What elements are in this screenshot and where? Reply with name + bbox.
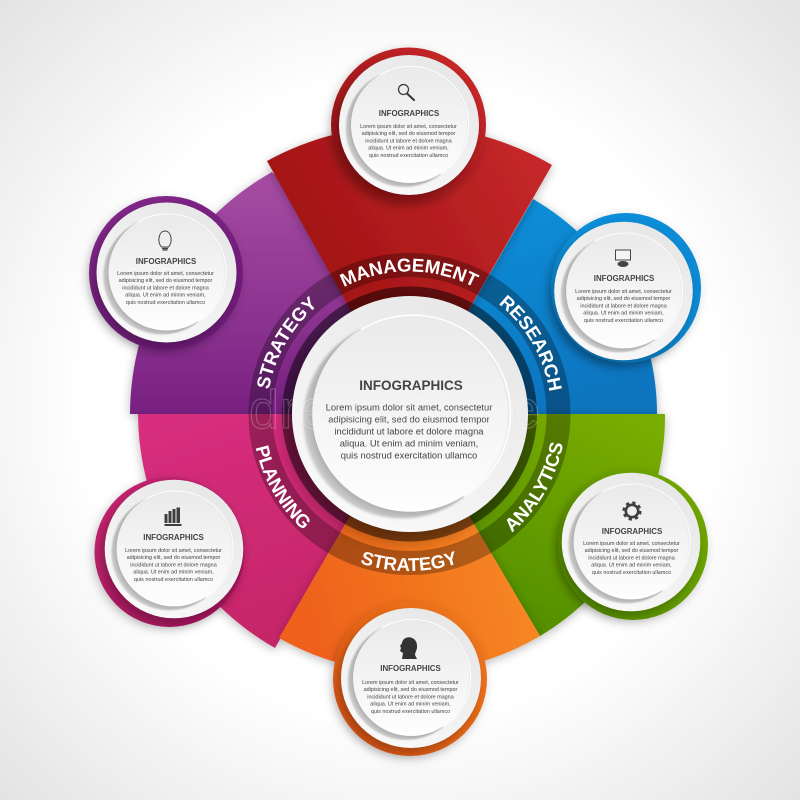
- text block: adipisicing elit, sed do eiusmod tempor: [585, 548, 679, 554]
- pink ring: [94, 477, 244, 627]
- text block: quis nostrud exercitation ullamco: [371, 709, 450, 715]
- white disc: [337, 608, 481, 754]
- label: planning: PLANNING: [256, 445, 310, 528]
- watermark: dreamstime: [249, 380, 541, 440]
- label: research: RESEARCH: [499, 294, 562, 391]
- centre text block: quis nostrud exercitation ullamco: [341, 450, 477, 460]
- sector: green: [409, 414, 665, 636]
- heading: INFOGRAPHICS: [602, 527, 662, 536]
- label: management: MANAGEMENT: [340, 258, 480, 287]
- white disc: [558, 473, 700, 617]
- label: strategy bottom: STRATEGY: [361, 551, 454, 572]
- sector: red: [267, 126, 552, 414]
- text block: incididunt ut labore et dolore magna: [588, 555, 676, 561]
- text block: incididunt ut labore et dolore magna: [122, 285, 210, 291]
- text block: quis nostrud exercitation ullamco: [584, 318, 663, 324]
- text block: adipisicing elit, sed do eiusmod tempor: [362, 131, 456, 137]
- white disc: [335, 55, 479, 201]
- text block: aliqua. Ut enim ad minim veniam,: [583, 311, 664, 317]
- label: analytics: ANALYTICS: [506, 442, 562, 532]
- text block: aliqua. Ut enim ad minim veniam,: [591, 563, 672, 569]
- text block: aliqua. Ut enim ad minim veniam,: [370, 702, 451, 708]
- text block: incididunt ut labore et dolore magna: [580, 303, 668, 309]
- white disc: [101, 480, 243, 624]
- blue ring: [551, 213, 701, 363]
- icon: head silhouette: [400, 637, 417, 659]
- panel: green disc: [558, 470, 708, 620]
- panel: pink disc: [94, 477, 244, 627]
- centre text block: incididunt ut labore et dolore magna: [334, 426, 484, 436]
- icon: magnifier: [398, 84, 414, 100]
- text block: incididunt ut labore et dolore magna: [130, 562, 218, 568]
- centre text block: Lorem ipsum dolor sit amet, consectetur: [326, 402, 492, 412]
- orange ring: [333, 602, 487, 756]
- heading: INFOGRAPHICS: [136, 257, 196, 266]
- centre text block: adipisicing elit, sed do eiusmod tempor: [328, 414, 490, 424]
- text block: quis nostrud exercitation ullamco: [592, 570, 671, 576]
- text block: quis nostrud exercitation ullamco: [369, 153, 448, 159]
- sector: orange: [279, 414, 540, 672]
- text block: adipisicing elit, sed do eiusmod tempor: [577, 296, 671, 302]
- green ring: [558, 470, 708, 620]
- text block: Lorem ipsum dolor sit amet, consectetur: [583, 541, 680, 547]
- panel: purple disc: [89, 196, 243, 350]
- icon: monitor: [616, 250, 630, 267]
- text block: Lorem ipsum dolor sit amet, consectetur: [362, 680, 459, 686]
- sector: purple: [130, 172, 409, 414]
- heading: INFOGRAPHICS: [380, 664, 441, 673]
- text block: Lorem ipsum dolor sit amet, consectetur: [575, 289, 672, 295]
- sector: pink: [138, 414, 409, 648]
- text block: adipisicing elit, sed do eiusmod tempor: [364, 687, 458, 693]
- text block: aliqua. Ut enim ad minim veniam,: [368, 146, 449, 152]
- text block: aliqua. Ut enim ad minim veniam,: [133, 570, 214, 576]
- text block: Lorem ipsum dolor sit amet, consectetur: [117, 271, 214, 277]
- text block: adipisicing elit, sed do eiusmod tempor: [127, 555, 221, 561]
- red ring: [331, 48, 486, 202]
- text block: incididunt ut labore et dolore magna: [365, 138, 453, 144]
- text block: Lorem ipsum dolor sit amet, consectetur: [360, 124, 457, 130]
- sector: blue: [409, 199, 657, 414]
- text block: quis nostrud exercitation ullamco: [134, 577, 213, 583]
- purple ring: [89, 196, 243, 350]
- heading: INFOGRAPHICS: [379, 109, 439, 118]
- panel: blue disc: [550, 213, 701, 366]
- wheel of six coloured sectors: [130, 126, 665, 672]
- text block: aliqua. Ut enim ad minim veniam,: [125, 293, 206, 299]
- panel: red top disc: [331, 48, 486, 202]
- curved sector labels: [256, 258, 562, 572]
- panel: centre disc: [285, 296, 528, 542]
- icon: light bulb: [159, 231, 171, 250]
- heading: INFOGRAPHICS: [143, 533, 204, 542]
- centre heading: INFOGRAPHICS: [359, 378, 463, 393]
- label: strategy left: STRATEGY: [257, 296, 314, 388]
- white disc: [92, 202, 236, 348]
- heading: INFOGRAPHICS: [594, 274, 654, 283]
- text block: quis nostrud exercitation ullamco: [126, 300, 205, 306]
- white disc: [550, 222, 693, 366]
- text block: incididunt ut labore et dolore magna: [367, 694, 455, 700]
- icon: gear: [624, 503, 640, 519]
- panel: orange disc: [333, 602, 487, 756]
- text block: Lorem ipsum dolor sit amet, consectetur: [125, 548, 222, 554]
- inner dark ring: [287, 292, 532, 536]
- centre text block: aliqua. Ut enim ad minim veniam,: [340, 438, 478, 448]
- centre disc shape: [285, 296, 528, 542]
- text block: adipisicing elit, sed do eiusmod tempor: [119, 278, 213, 284]
- icon: bar chart: [164, 508, 182, 526]
- label band ring: [260, 265, 558, 563]
